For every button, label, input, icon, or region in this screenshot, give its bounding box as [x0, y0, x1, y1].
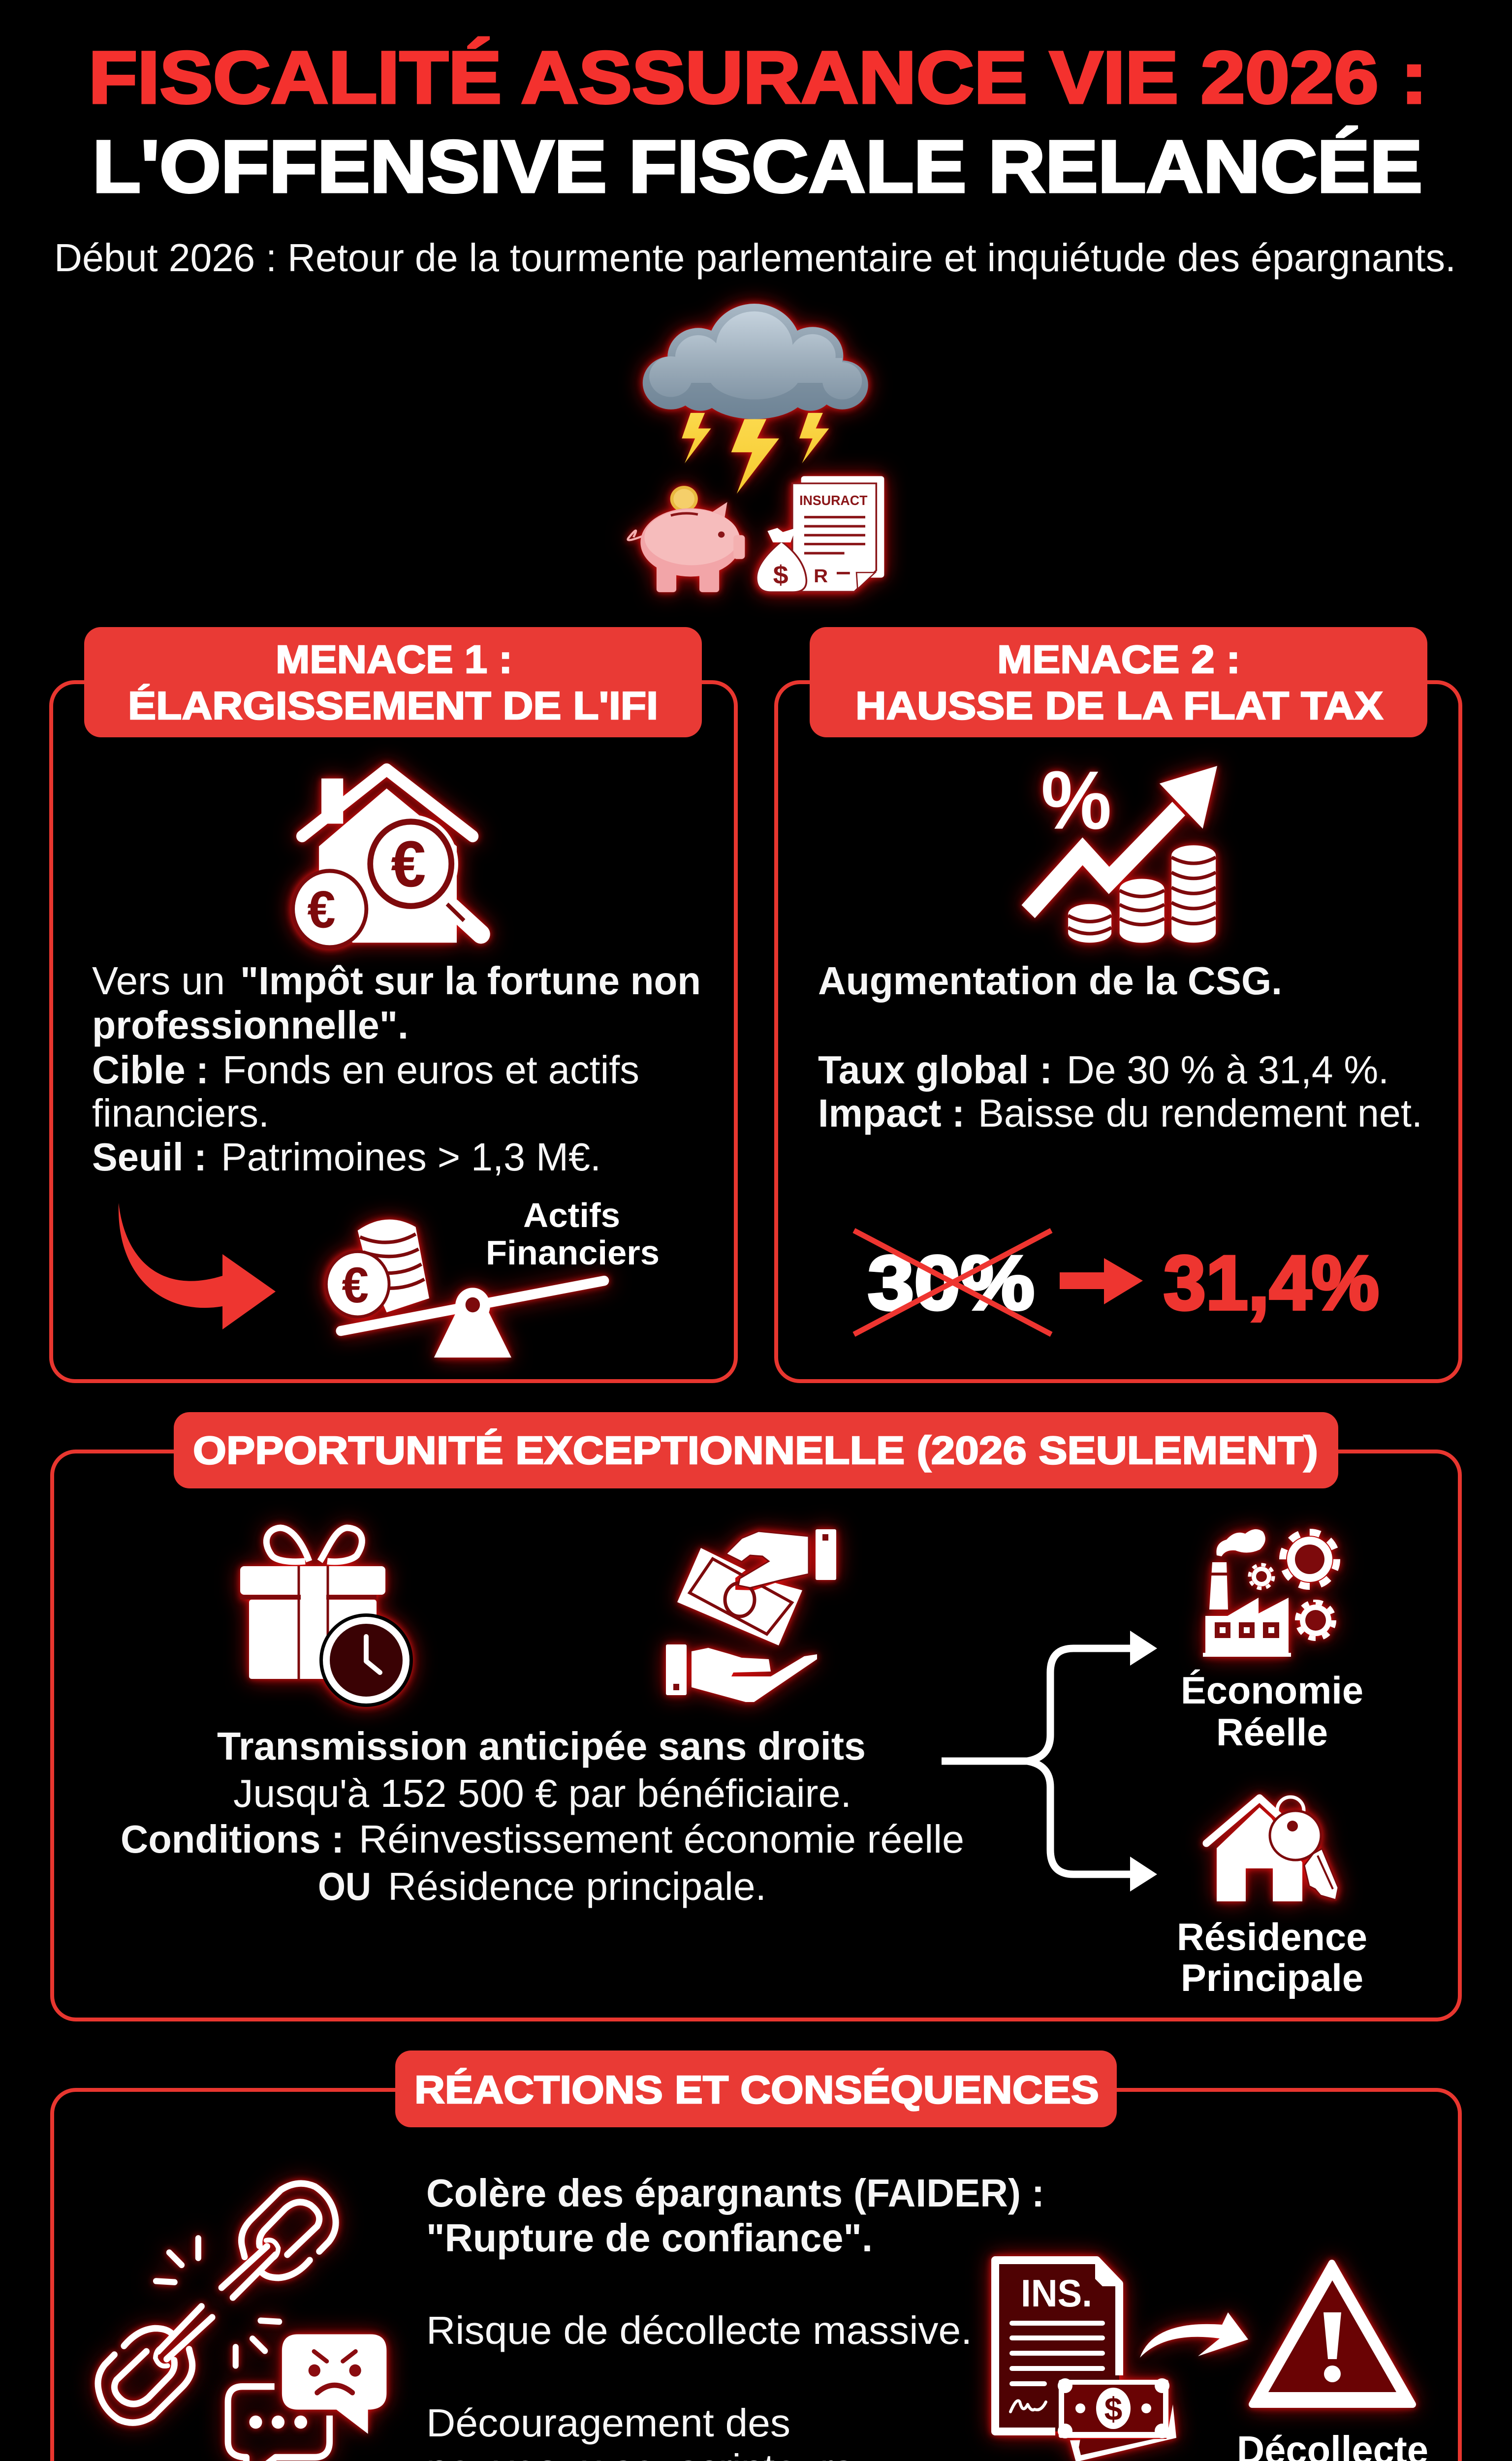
icon: seesaw with coins	[325, 1220, 604, 1357]
icon: storm over savings: R	[814, 566, 828, 587]
tab heading	[84, 627, 702, 737]
tab heading	[174, 1412, 1338, 1488]
panel frame	[52, 1451, 1460, 2019]
text block: Résidence principale.	[388, 1864, 766, 1908]
text block: Conditions :	[121, 1817, 344, 1861]
label: économie réelle: Économie	[1181, 1669, 1363, 1712]
icon: storm over savings	[628, 304, 884, 592]
text block: Colère des épargnants (FAIDER) :	[426, 2171, 1044, 2215]
text block: Augmentation de la CSG.	[818, 959, 1282, 1003]
title: L'OFFENSIVE FISCALE RELANCÉE	[93, 125, 1422, 208]
panel: réactions	[52, 2051, 1460, 2461]
label: actifs financiers: Actifs	[523, 1196, 620, 1234]
tab heading: OPPORTUNITÉ EXCEPTIONNELLE (2026 SEULEMENT)	[193, 1428, 1318, 1472]
text block: Risque de décollecte massive.	[426, 2308, 972, 2352]
icon: storm over savings: INSURACT	[799, 493, 868, 508]
label: économie réelle	[1181, 1669, 1363, 1754]
icon: rising arrow with percent and coins	[1028, 754, 1217, 943]
text block: "Impôt sur la fortune non	[240, 959, 701, 1003]
title	[89, 36, 1427, 208]
text block	[121, 1724, 964, 1908]
text block: professionnelle".	[92, 1003, 409, 1047]
icon: storm over savings: $	[773, 561, 788, 590]
tab heading: HAUSSE DE LA FLAT TAX	[855, 684, 1383, 727]
text block: Réinvestissement économie réelle	[359, 1817, 964, 1861]
tab heading	[395, 2051, 1117, 2127]
icon: factory and gears	[1203, 1529, 1337, 1657]
text block: Impact :	[818, 1091, 965, 1135]
rate change: 30% to 31,4%	[854, 1230, 1379, 1334]
arrow: red curved	[119, 1203, 276, 1329]
text block	[92, 959, 701, 1179]
text block: De 30 % à 31,4 %.	[1067, 1048, 1389, 1092]
text block: Jusqu'à 152 500 € par bénéficiaire.	[233, 1771, 851, 1815]
icon: hands exchanging money	[666, 1529, 836, 1702]
text block	[818, 959, 1422, 1135]
panel: opportunité	[52, 1412, 1460, 2019]
panel frame	[51, 682, 736, 1381]
panel: menace 1	[51, 627, 736, 1381]
tab heading: MENACE 2 :	[997, 637, 1240, 681]
panel frame	[776, 682, 1460, 1381]
tab heading: RÉACTIONS ET CONSÉQUENCES	[414, 2068, 1099, 2112]
icon: gift with clock	[240, 1528, 413, 1707]
icon: house with magnifier and euro: €	[391, 827, 426, 901]
label: résidence principale	[1177, 1915, 1367, 1999]
arrow: branching	[942, 1631, 1157, 1892]
text block: "Rupture de confiance".	[426, 2216, 873, 2260]
label: résidence principale: Principale	[1181, 1956, 1363, 1999]
icon: rising arrow with percent and coins: %	[1041, 754, 1111, 846]
text block: OU	[318, 1864, 371, 1908]
icon: broken chain and angry chat	[98, 2183, 386, 2461]
icon: house with magnifier and euro: €	[307, 881, 336, 939]
icon: house with magnifier and euro	[291, 769, 481, 949]
label: actifs financiers	[486, 1196, 660, 1272]
text block: Seuil :	[92, 1135, 207, 1179]
text block: Transmission anticipée sans droits	[217, 1724, 866, 1768]
icon: insurance document to withdrawal: $	[1104, 2391, 1122, 2427]
text block: Baisse du rendement net.	[978, 1091, 1422, 1135]
text block: Cible :	[92, 1048, 209, 1092]
label: économie réelle: Réelle	[1216, 1710, 1328, 1754]
label: résidence principale: Résidence	[1177, 1915, 1367, 1958]
tab heading: MENACE 1 :	[276, 637, 512, 681]
icon: seesaw with coins: €	[342, 1257, 369, 1313]
text block: Taux global :	[818, 1048, 1052, 1092]
icon: house with keys	[1206, 1797, 1338, 1901]
subtitle: Début 2026 : Retour de la tourmente parlementaire et inquiétude des épargnants.	[54, 236, 1456, 280]
tab heading: ÉLARGISSEMENT DE L'IFI	[128, 684, 658, 727]
rate change: 30% to 31,4%: 30%	[868, 1240, 1035, 1326]
title: FISCALITÉ ASSURANCE VIE 2026 :	[89, 36, 1427, 119]
text block: Patrimoines > 1,3 M€.	[221, 1135, 601, 1179]
tab heading	[810, 627, 1427, 737]
icon: insurance document to withdrawal	[995, 2260, 1413, 2461]
text block: Vers un	[92, 959, 225, 1003]
text block: Fonds en euros et actifs	[222, 1048, 639, 1092]
panel frame	[52, 2090, 1460, 2461]
rate change: 30% to 31,4%: 31,4%	[1164, 1240, 1379, 1326]
text block: financiers.	[92, 1091, 269, 1135]
icon: insurance document to withdrawal: INS.	[1021, 2272, 1092, 2315]
text block: Découragement des	[426, 2401, 790, 2445]
text block	[426, 2171, 1044, 2461]
panel: menace 2	[776, 627, 1460, 1381]
label: actifs financiers: Financiers	[486, 1233, 660, 1272]
